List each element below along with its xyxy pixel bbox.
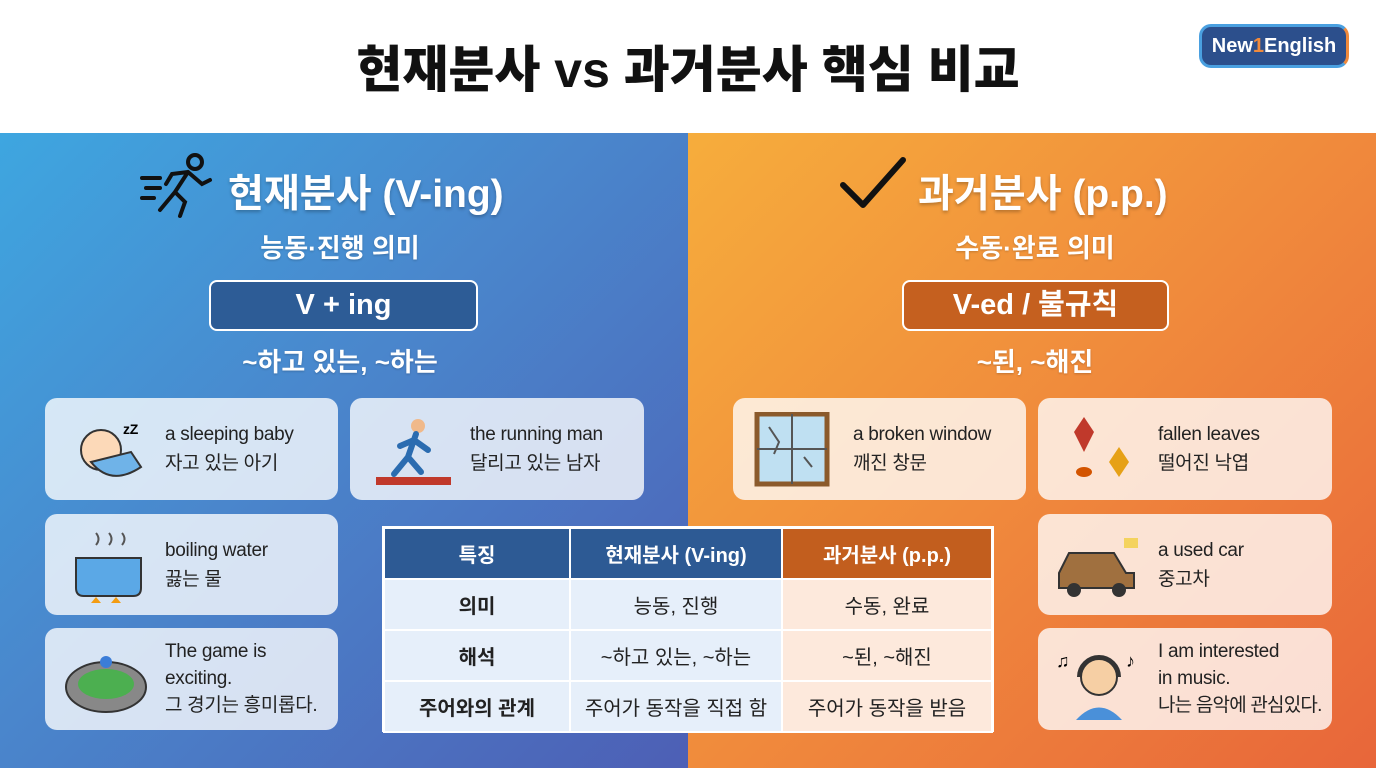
card: interested in music: ♫ — [1056, 651, 1069, 671]
card: boiling water: boiling water — [165, 540, 268, 561]
formula box past: V-ed / 불규칙 — [953, 289, 1118, 321]
title: 현재분사 vs 과거분사 핵심 비교 — [356, 42, 1020, 98]
comparison table: 주어와의 관계 — [419, 698, 535, 720]
card: fallen leaves: fallen leaves — [1158, 424, 1260, 445]
comparison table: 현재분사 (V-ing) — [605, 545, 747, 567]
card: fallen leaves — [1038, 398, 1332, 500]
comparison table: 의미 — [459, 596, 495, 618]
translation present: ~하고 있는, ~하는 — [242, 347, 438, 377]
comparison table: 특징 — [459, 545, 495, 567]
card: used car — [1038, 514, 1332, 615]
card: exciting game: 그 경기는 흥미롭다. — [165, 695, 317, 716]
panel: present participle — [0, 133, 688, 768]
comparison table: 주어가 동작을 받음 — [808, 698, 966, 720]
card: interested in music: I am interested — [1158, 641, 1279, 662]
card: interested in music — [1038, 628, 1332, 730]
comparison table: 능동, 진행 — [634, 596, 718, 618]
card: exciting game: The game is — [165, 641, 266, 662]
comparison table: ~하고 있는, ~하는 — [601, 647, 751, 669]
card: broken window: a broken window — [853, 424, 991, 445]
card: broken window — [733, 398, 1026, 500]
formula box present: V + ing — [296, 289, 391, 321]
translation past: ~된, ~해진 — [977, 347, 1093, 377]
card: used car: 중고차 — [1158, 569, 1210, 590]
card: sleeping baby — [45, 398, 338, 500]
comparison table: 수동, 완료 — [845, 596, 929, 618]
logo — [1199, 24, 1349, 68]
formula box past — [902, 280, 1169, 331]
card: boiling water — [45, 514, 338, 615]
comparison table: 주어가 동작을 직접 함 — [585, 698, 767, 720]
card: fallen leaves: 떨어진 낙엽 — [1158, 453, 1249, 474]
card: used car: a used car — [1158, 540, 1244, 561]
card: running man: the running man — [470, 424, 603, 445]
card: running man: 달리고 있는 남자 — [470, 453, 600, 474]
icon: check — [840, 157, 906, 208]
card: sleeping baby: 자고 있는 아기 — [165, 453, 278, 474]
icon: runner — [140, 153, 212, 218]
panel: past participle — [688, 133, 1376, 768]
card: interested in music: in music. — [1158, 668, 1230, 689]
card: interested in music: 나는 음악에 관심있다. — [1158, 695, 1322, 716]
card: broken window: 깨진 창문 — [853, 453, 927, 474]
comparison table: 해석 — [459, 647, 495, 669]
card: boiling water: 끓는 물 — [165, 569, 222, 590]
comparison table: 과거분사 (p.p.) — [823, 545, 951, 567]
subheading past: 수동·완료 의미 — [955, 233, 1115, 263]
heading: past: 과거분사 (p.p.) — [918, 173, 1168, 216]
heading: present: 현재분사 (V-ing) — [228, 173, 504, 216]
formula box present — [209, 280, 478, 331]
subheading present: 능동·진행 의미 — [260, 233, 420, 263]
card: sleeping baby: zZ — [123, 421, 139, 437]
card: interested in music: ♪ — [1126, 651, 1135, 671]
comparison table: ~된, ~해진 — [842, 647, 932, 669]
card: running man — [350, 398, 644, 500]
comparison table — [382, 526, 994, 732]
logo: New1English — [1212, 35, 1336, 57]
card: sleeping baby: a sleeping baby — [165, 424, 294, 445]
card: exciting game: exciting. — [165, 668, 232, 689]
card: exciting game — [45, 628, 338, 730]
